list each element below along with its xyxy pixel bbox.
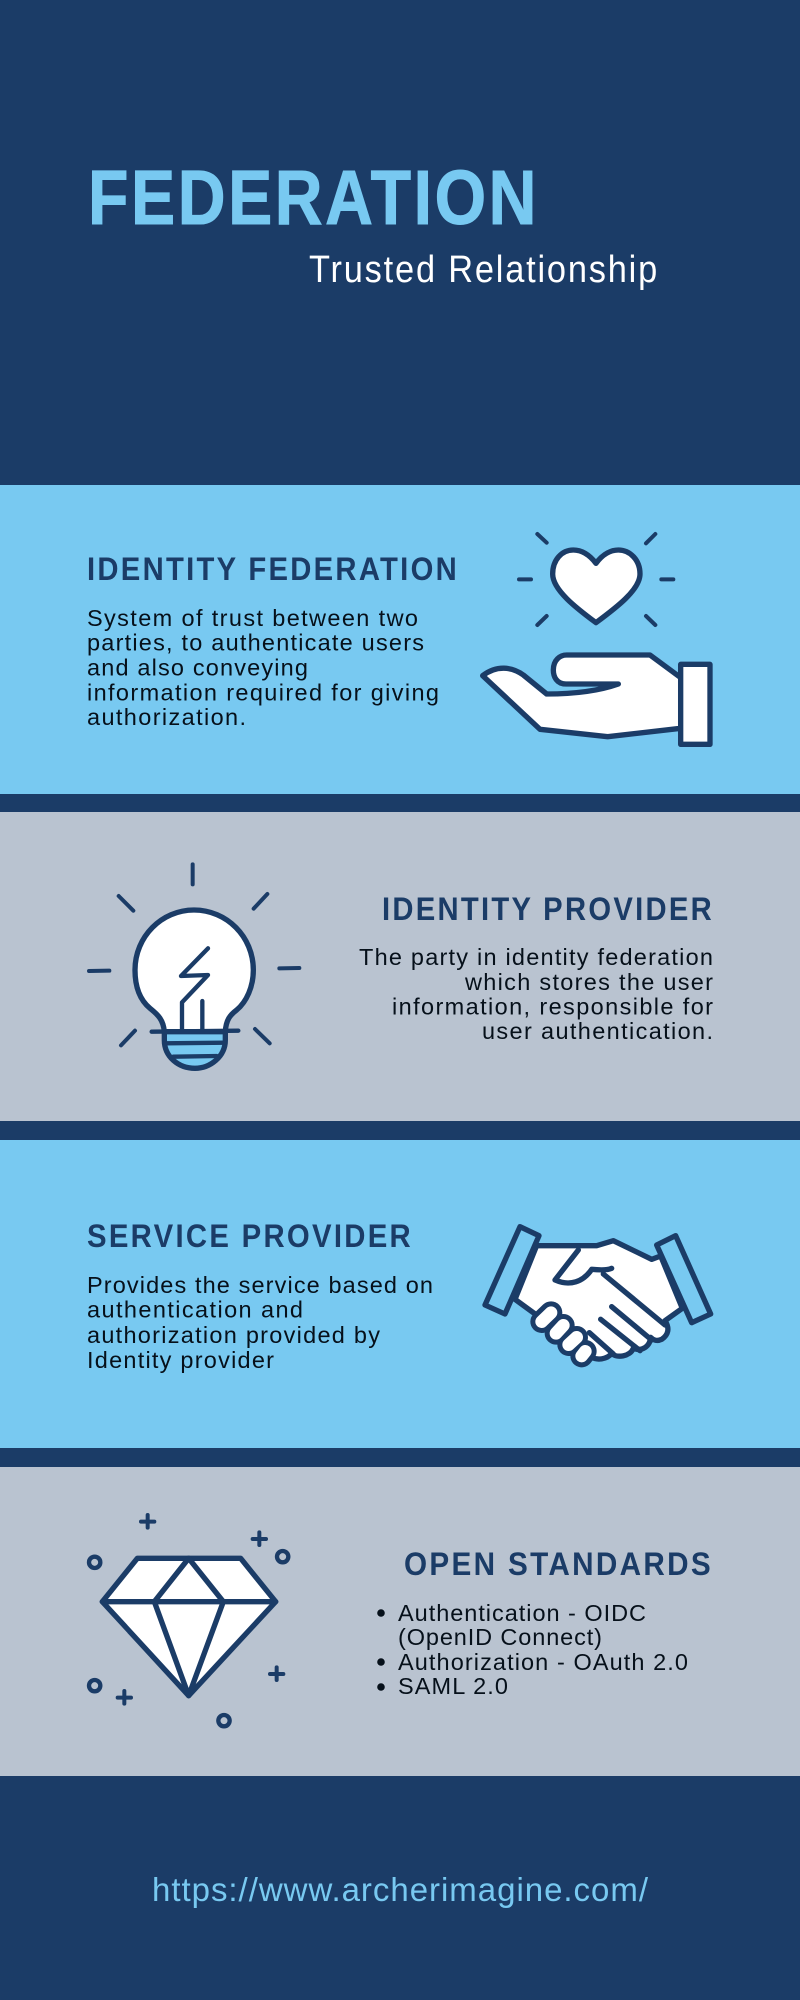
text: identity federation description: System of trust between two bbox=[87, 605, 418, 631]
list: open standards: (OpenID Connect) bbox=[398, 1624, 602, 1650]
text: identity provider description: which stores the user bbox=[464, 969, 713, 995]
text: service provider description bbox=[87, 1272, 433, 1373]
title: FEDERATION bbox=[88, 155, 539, 241]
panel: identity federation bbox=[0, 485, 800, 794]
subtitle: Trusted Relationship bbox=[309, 249, 659, 291]
divider band bbox=[0, 1448, 800, 1467]
icon: handshake bbox=[485, 1227, 711, 1359]
list: open standards: SAML 2.0 bbox=[398, 1673, 508, 1699]
text: identity provider description: information, responsible for bbox=[392, 994, 713, 1020]
text: identity provider description: user authentication. bbox=[482, 1018, 713, 1044]
icon: light bulb bbox=[89, 864, 299, 1068]
header panel bbox=[0, 0, 800, 485]
heading: service provider: SERVICE PROVIDER bbox=[87, 1218, 413, 1254]
text: identity federation description: parties, to authenticate users bbox=[87, 630, 424, 656]
text: identity provider description bbox=[359, 944, 713, 1044]
list: open standards: Authentication - OIDC bbox=[398, 1600, 646, 1626]
divider band bbox=[0, 1121, 800, 1140]
panel: service provider bbox=[0, 1140, 800, 1448]
text: service provider description: Identity provider bbox=[87, 1347, 274, 1373]
text: identity federation description bbox=[87, 605, 439, 730]
text: identity provider description: The party in identity federation bbox=[359, 944, 713, 970]
icon: hand holding heart bbox=[483, 534, 710, 744]
footer link: https://www.archerimagine.com/ bbox=[152, 1871, 649, 1908]
divider band bbox=[0, 794, 800, 812]
heading: identity provider: IDENTITY PROVIDER bbox=[382, 891, 714, 927]
text: service provider description: authorization provided by bbox=[87, 1322, 380, 1348]
heading: open standards: OPEN STANDARDS bbox=[404, 1546, 713, 1582]
panel: identity provider bbox=[0, 812, 800, 1121]
text: identity federation description: and also conveying bbox=[87, 654, 308, 680]
panel: open standards bbox=[0, 1467, 800, 1776]
list: open standards: Authorization - OAuth 2.0 bbox=[398, 1649, 688, 1675]
icon: diamond with sparkles bbox=[89, 1515, 288, 1726]
text: service provider description: Provides the service based on bbox=[87, 1272, 433, 1298]
text: identity federation description: information required for giving bbox=[87, 680, 439, 706]
list: open standards bbox=[377, 1600, 688, 1699]
text: service provider description: authentication and bbox=[87, 1296, 303, 1322]
heading: identity federation: IDENTITY FEDERATION bbox=[87, 551, 459, 587]
text: identity federation description: authorization. bbox=[87, 704, 246, 730]
